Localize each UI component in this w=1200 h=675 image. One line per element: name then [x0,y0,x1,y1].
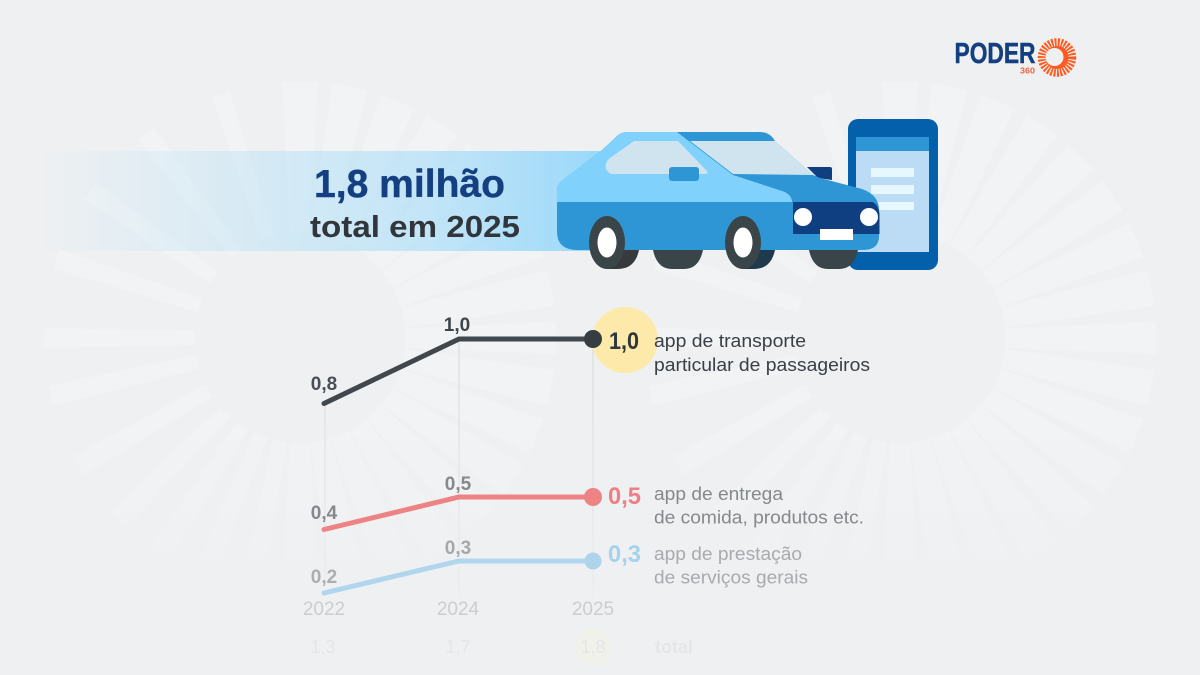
label: transporte: app de transporte [654,330,806,351]
label: serviços: app de prestação [654,543,802,564]
x axis years: 2022 [303,599,345,620]
icon: car [557,132,880,269]
icon: phone [848,119,938,270]
totals row [310,628,693,666]
series: serviços: 0,2 [311,567,337,588]
label: serviços [654,543,808,588]
highlight circle [592,307,658,373]
series: serviços: 0,3 [608,541,641,568]
totals row: 1,8 [580,637,606,657]
series: entrega: 0,5 [445,474,472,495]
x axis years: 2025 [572,599,614,620]
series: entrega: 0,4 [311,503,338,524]
headline band [40,151,600,251]
totals row: total [655,637,693,657]
label: serviços: de serviços gerais [654,566,808,588]
series: transporte de passageiros: 0,8 [311,374,337,395]
logo: Poder360: PODER [954,38,1036,70]
series: transporte de passageiros: 1,0 [444,315,470,336]
series: transporte de passageiros: 1,0 [609,328,639,355]
logo: Poder360: 360 [1020,66,1035,76]
totals row: 1,7 [445,637,471,657]
label: entrega [654,483,864,528]
series: serviços: 0,3 [445,538,471,559]
totals row: 1,3 [310,637,336,657]
series: serviços [311,538,641,593]
series: entrega: 0,5 [608,483,641,510]
label: entrega: app de entrega [654,483,784,504]
headline: 1,8 milhão: 1,8 milhão [314,163,505,206]
label: entrega: de comida, produtos etc. [654,506,864,528]
series: entrega [311,474,641,530]
x axis years: 2024 [437,599,480,620]
series: transporte de passageiros [311,315,639,404]
subheading: total em 2025: total em 2025 [310,209,520,244]
line chart [303,307,870,666]
x axis years [303,599,614,620]
label: transporte [654,330,870,375]
label: transporte: particular de passageiros [654,354,870,375]
